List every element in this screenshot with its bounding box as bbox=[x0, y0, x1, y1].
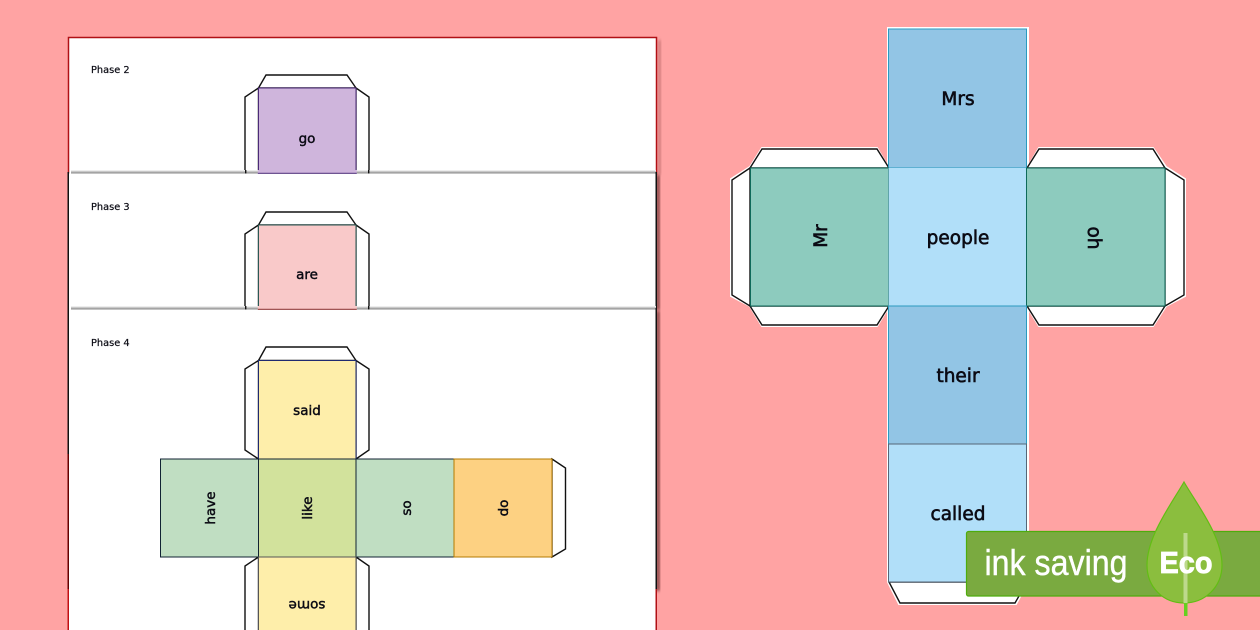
banner bbox=[966, 532, 1260, 596]
label: ink saving: ink saving bbox=[984, 542, 1128, 583]
face: Mr: Mr bbox=[811, 224, 832, 248]
panel: Phase 3 sheet bbox=[68, 170, 660, 310]
face: called bbox=[888, 444, 1026, 582]
label: Phase 2: Phase 2 bbox=[91, 65, 130, 76]
panel: large cube net bbox=[731, 28, 1185, 604]
net: Phase 3 flaps bbox=[245, 212, 369, 309]
net: Phase 2 flaps bbox=[245, 75, 369, 173]
face: oh: oh bbox=[1083, 226, 1104, 250]
face: have: have bbox=[203, 491, 219, 525]
face: said: said bbox=[293, 403, 321, 419]
face: like: like bbox=[300, 496, 316, 520]
face: are bbox=[258, 225, 356, 309]
face: so: so bbox=[399, 500, 415, 516]
panel: Phase 2 sheet bbox=[68, 38, 661, 175]
face: go bbox=[258, 88, 356, 173]
face: some: some bbox=[289, 597, 325, 613]
net: Phase 4 flaps bbox=[245, 347, 566, 630]
net: flaps bbox=[732, 149, 1184, 603]
face: Mrs bbox=[888, 29, 1026, 168]
face: said bbox=[258, 360, 356, 459]
face: their: their bbox=[936, 366, 980, 387]
label: Phase 4: Phase 4 bbox=[91, 338, 130, 349]
panel: Phase 4 sheet bbox=[68, 306, 660, 630]
face: oh bbox=[1026, 168, 1165, 306]
face: people bbox=[888, 168, 1027, 306]
badge: ink saving Eco bbox=[966, 482, 1260, 616]
label: Phase 3: Phase 3 bbox=[91, 202, 130, 213]
face: Mr bbox=[750, 168, 888, 306]
label: Eco: Eco bbox=[1160, 545, 1212, 580]
face: have bbox=[160, 459, 258, 557]
face: Mrs: Mrs bbox=[941, 89, 975, 110]
face: people: people bbox=[927, 228, 989, 249]
net: white outline bbox=[731, 28, 1185, 604]
face: some bbox=[258, 557, 356, 630]
face: so bbox=[356, 459, 454, 557]
face: their bbox=[888, 306, 1026, 444]
face: are: are bbox=[296, 267, 318, 283]
icon: leaf bbox=[1147, 482, 1222, 616]
face: do: do bbox=[496, 500, 512, 516]
face: called: called bbox=[931, 504, 985, 525]
face: do bbox=[454, 459, 552, 557]
face: like bbox=[258, 459, 356, 557]
face: go: go bbox=[299, 131, 315, 147]
